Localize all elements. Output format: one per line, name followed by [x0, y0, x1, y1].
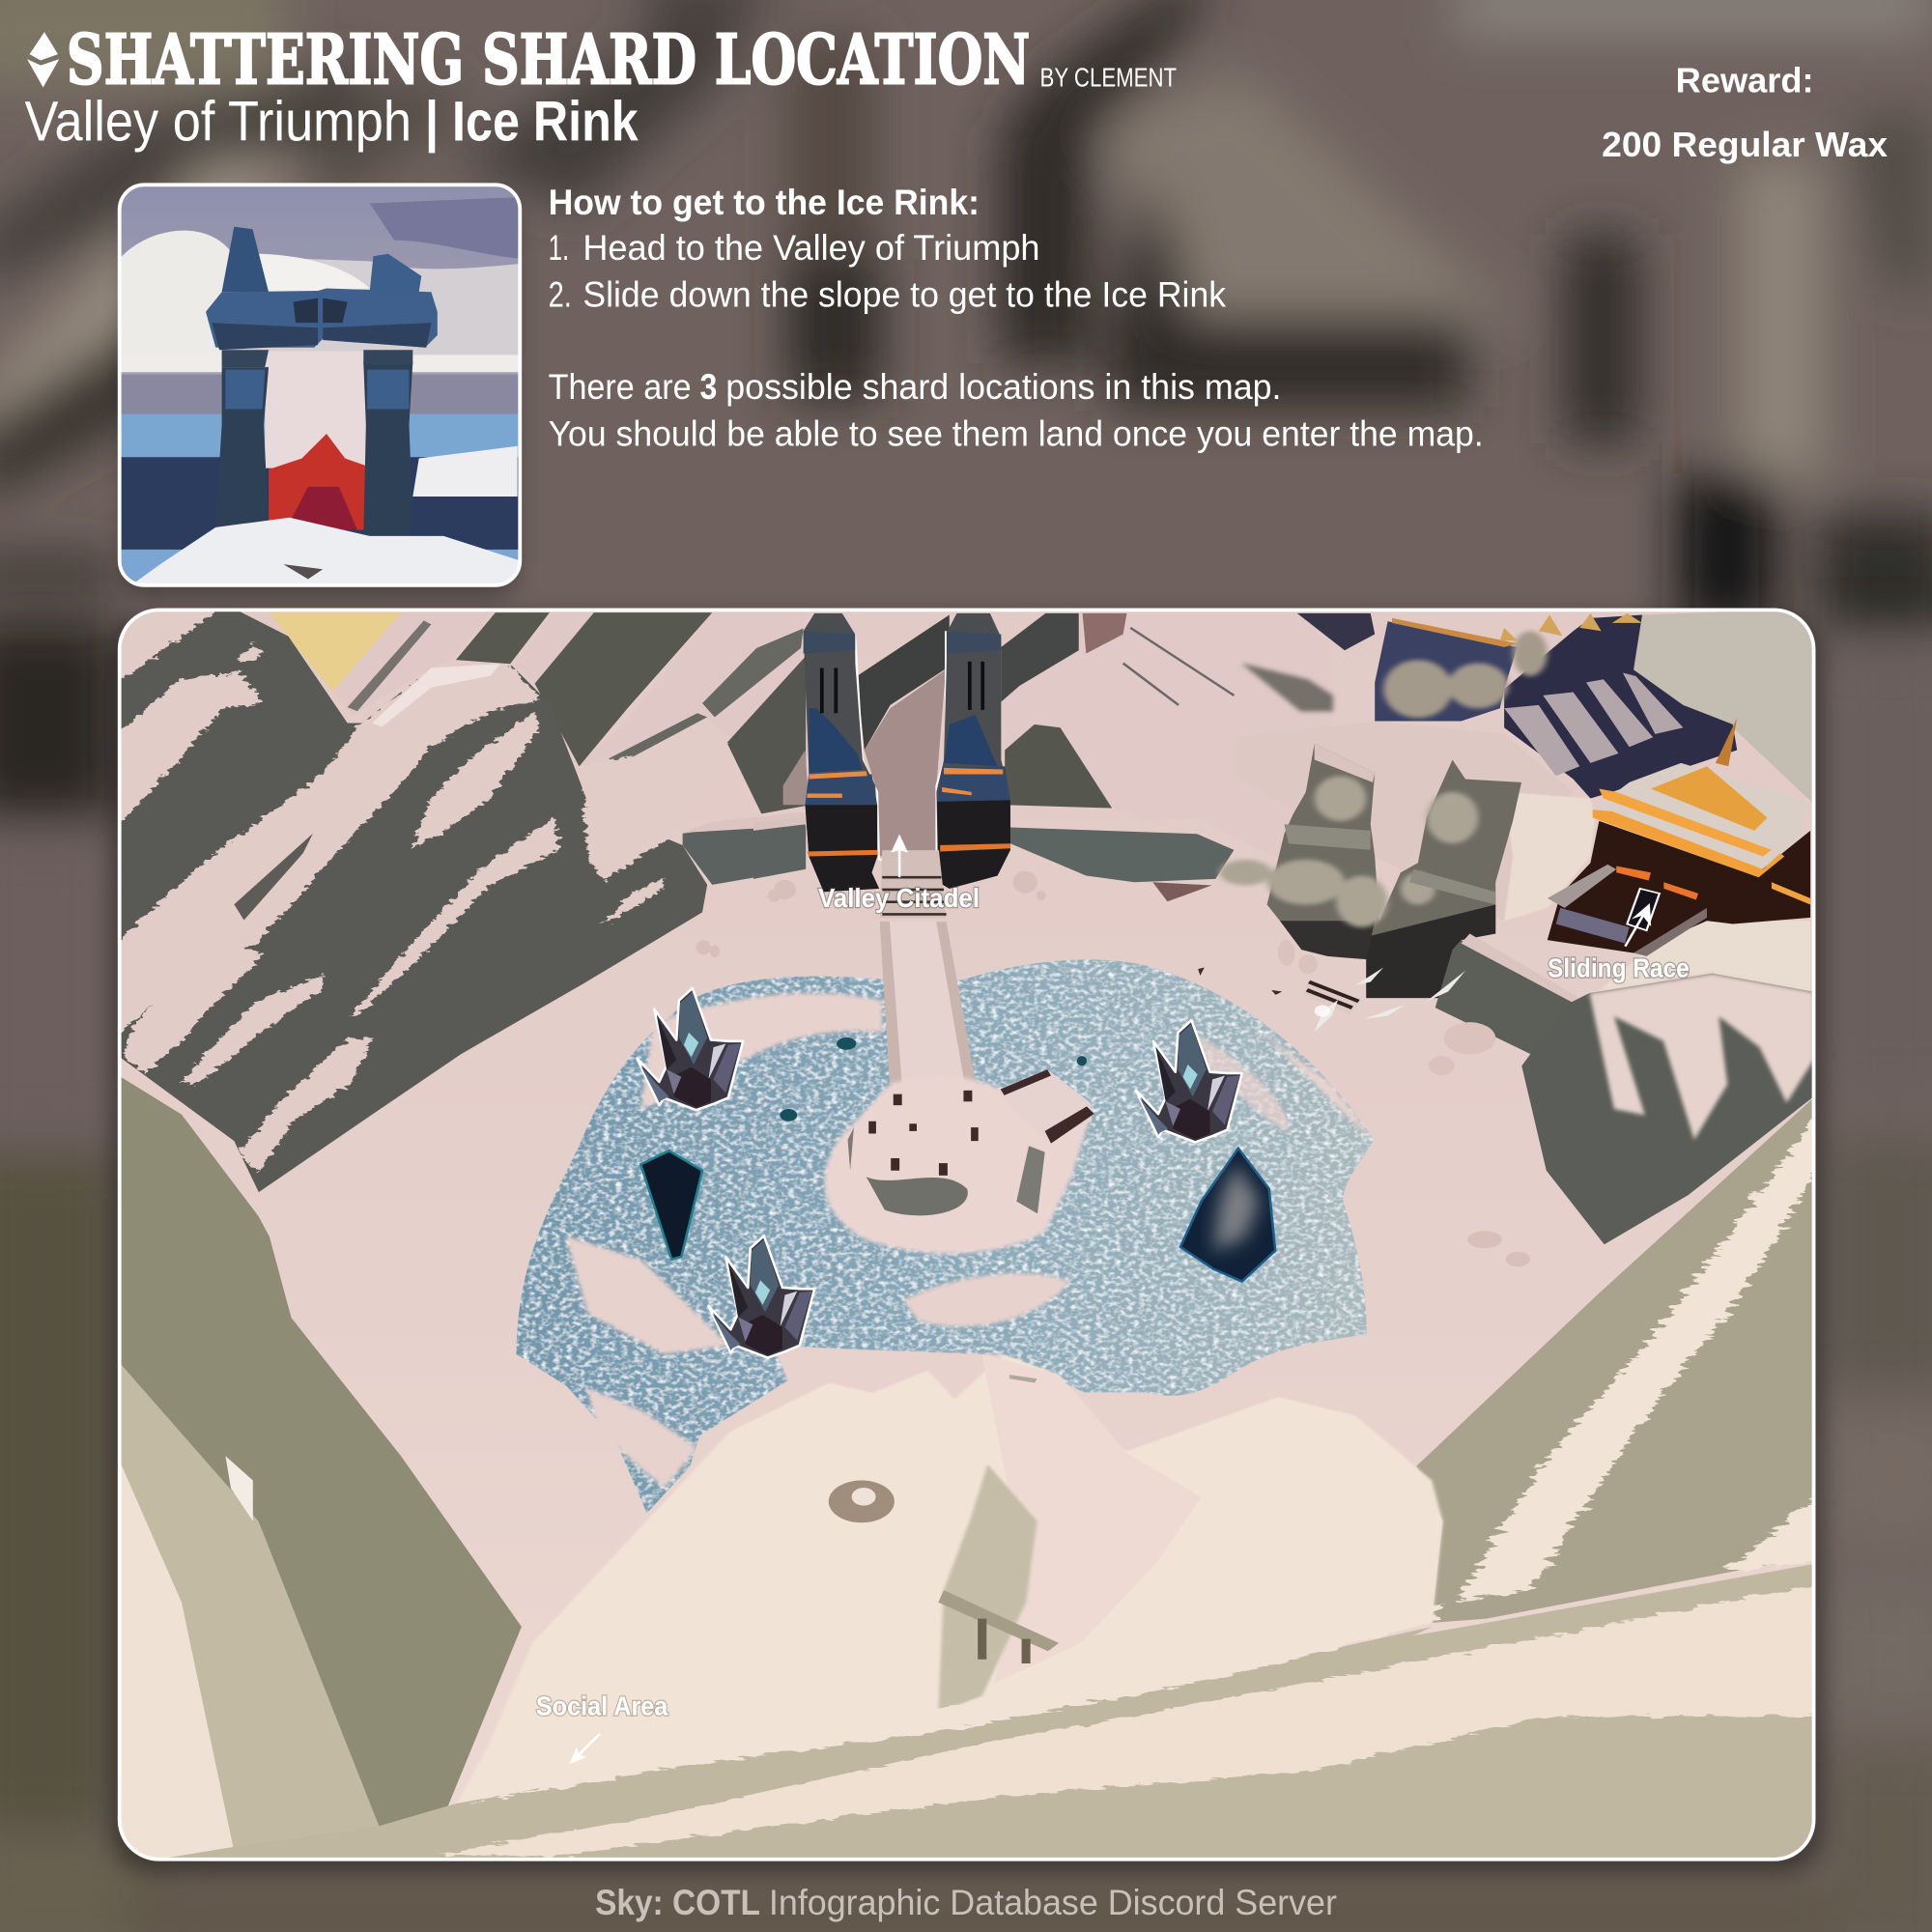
reward	[1602, 62, 1888, 164]
author credit: BY CLEMENT	[1040, 62, 1177, 92]
shard crystal 2	[1136, 1020, 1242, 1142]
snow base	[120, 610, 1814, 1860]
header icon: shard diamond	[27, 32, 59, 88]
arrow: valley citadel	[898, 850, 900, 877]
instructions: 1.	[549, 228, 569, 268]
label: sliding race: Sliding Race	[1548, 952, 1690, 982]
arrow: social area	[579, 1734, 600, 1754]
footer: Infographic Database Discord Server	[769, 1883, 1337, 1922]
citadel towers	[804, 613, 1010, 892]
instructions: 2.	[549, 275, 572, 315]
shard crystal 1	[637, 988, 743, 1110]
shard fragment: right	[1180, 1149, 1275, 1282]
melted holes	[780, 1037, 1087, 1122]
right fortress and temple	[1198, 609, 1815, 1075]
instructions: 3	[699, 367, 717, 407]
bridge	[880, 850, 976, 1084]
footer: Sky: COTL	[595, 1883, 760, 1922]
shard crystal 3	[708, 1236, 814, 1358]
ground rocks	[696, 871, 1530, 1266]
instructions: Slide down the slope to get to the Ice Rink	[582, 275, 1227, 315]
arrowhead: sliding race	[1632, 903, 1651, 926]
arrowhead: social area	[569, 1747, 586, 1765]
subtitle: Valley of Triumph	[25, 90, 412, 153]
reward: 200 Regular Wax	[1602, 126, 1888, 164]
upper right ridges	[753, 613, 1333, 901]
left mountain	[111, 605, 806, 1192]
label: valley citadel: Valley Citadel	[818, 883, 980, 913]
central island	[824, 1069, 1094, 1254]
title: SHATTERING SHARD LOCATION	[67, 19, 1030, 100]
instructions: How to get to the Ice Rink:	[549, 183, 980, 222]
label: social area: Social Area	[536, 1691, 668, 1721]
subtitle	[25, 90, 639, 154]
instructions: There are	[549, 367, 692, 407]
lower landscape	[110, 1074, 1827, 1862]
arrow: sliding race	[1625, 914, 1644, 947]
instructions: Head to the Valley of Triumph	[582, 228, 1040, 268]
ice rink	[516, 959, 1374, 1513]
right mound	[1521, 974, 1814, 1244]
panel: portal thumbnail	[120, 185, 520, 586]
instructions	[549, 183, 1484, 454]
snow patches	[565, 993, 1374, 1489]
instructions: You should be able to see them land once you enter the map.	[549, 414, 1484, 454]
instructions: possible shard locations in this map.	[725, 367, 1282, 407]
shard fragment: left	[640, 1151, 702, 1260]
subtitle: | Ice Rink	[425, 90, 639, 154]
arrowhead: valley citadel	[891, 835, 908, 853]
panel: ice rink map	[110, 605, 1827, 1862]
reward: Reward:	[1676, 62, 1814, 100]
